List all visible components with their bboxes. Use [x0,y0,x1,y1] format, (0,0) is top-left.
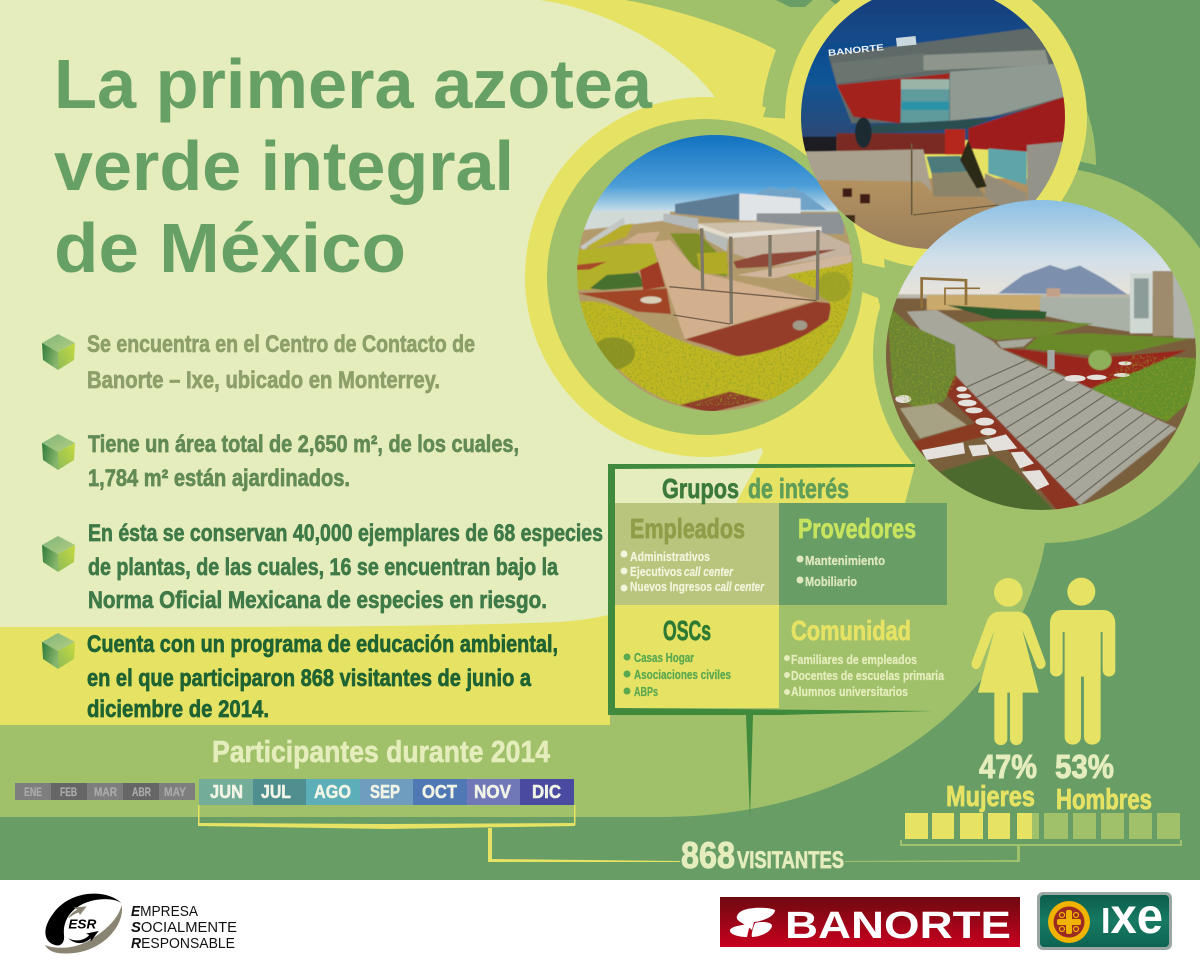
logo: ESR [45,894,237,954]
bullet text: Cuenta con un programa de educación ambiental, [87,631,558,658]
bullet text: En ésta se conservan 40,000 ejemplares de 68 especies [88,520,603,547]
icon: man [1050,578,1115,745]
quadrant: Provedores [796,513,916,589]
icon: cube [42,633,75,669]
quadrant: OSCs: Asociaciones civiles [634,667,731,682]
inactive months [15,783,195,800]
panel frame [608,464,933,715]
panel heading [662,473,849,504]
bullet text: de plantas, de las cuales, 16 se encuentran bajo la [88,554,558,581]
inactive months: ENE [24,785,42,799]
quadrant: Comunidad: Alumnos universitarios [791,684,908,699]
quadrant: Empleados: Administrativos [630,549,710,564]
photo: rooftop walkway and mountain [880,195,1200,515]
inactive months: MAR [94,785,117,799]
bullet text [87,331,475,394]
active months: JUL [261,782,291,802]
title: La primera azotea [54,45,653,123]
quadrant: Comunidad [784,615,945,699]
bullet: área [42,431,519,492]
quadrant: Provedores: Mantenimiento [805,553,885,568]
logo: Ixe: Ixe [1101,888,1163,944]
logo: Banorte [720,897,1020,947]
stat: hombres [1055,748,1152,816]
bullet text: Se encuentra en el Centro de Contacto de [87,331,475,358]
photo: rooftop garden with pergola [570,130,863,418]
logo mark [45,894,122,954]
logo text: SOCIALMENTE [131,920,237,936]
bullet: especies [42,520,603,614]
quadrant backgrounds [615,503,947,708]
logo mark: ESR [68,916,97,931]
active months: JUN [210,782,243,802]
photo: Banorte building: BANORTE [827,42,884,58]
bullet text: en el que participaron 868 visitantes de junio a [87,665,531,692]
quadrant: OSCs: OSCs [663,615,711,646]
quadrant: Comunidad: Comunidad [791,615,911,646]
bullet text: diciembre de 2014. [87,696,269,723]
bullet: ubicación [42,331,475,394]
stat: hombres: Hombres [1056,784,1152,816]
active months: OCT [422,782,457,802]
gender bar [905,813,1180,839]
icon: cube [42,334,75,370]
inactive months: ABR [132,785,151,799]
photo: Banorte building [795,0,1072,253]
panel heading: Grupos [662,473,739,504]
active months: NOV [474,782,511,802]
icon: woman [971,578,1046,745]
title: de México [54,209,406,287]
bullet text [87,631,558,723]
quadrant: Empleados: Ejecutivos [630,564,682,579]
active months [199,779,574,805]
bullet text: Banorte – Ixe, ubicado en Monterrey. [87,367,440,394]
timeline: months [15,779,574,805]
active months: SEP [370,782,400,802]
quadrant: Comunidad: Docentes de escuelas primaria [791,668,945,683]
icon: cube [42,434,75,470]
bullet text: Tiene un área total de 2,650 m², de los cuales, [88,431,519,458]
total: 868 visitantes: VISITANTES [737,847,844,874]
logo text: RESPONSABLE [131,936,235,952]
panel: grupos de interés [608,464,947,715]
logo text: EMPRESA [131,904,198,920]
inactive months: MAY [164,785,186,799]
quadrant: Empleados: Empleados [630,513,745,544]
title: verde integral [54,127,514,205]
stat: hombres: 53% [1055,748,1114,785]
quadrant: Empleados [620,513,765,594]
quadrant: Empleados: Nuevos Ingresos [630,579,712,594]
bracket: visitors to gender bar [845,840,1182,862]
quadrant: OSCs: ABPs [634,684,658,699]
bullet text: Norma Oficial Mexicana de especies en riesgo. [88,587,547,614]
bullet text [88,431,519,492]
quadrant: Empleados: call center [715,579,765,594]
active months: AGO [314,782,351,802]
stat: mujeres [946,748,1037,813]
total: 868 visitantes [681,835,844,876]
logo text [131,904,237,952]
bracket: months to visitors [198,805,680,862]
stat: mujeres: Mujeres [946,781,1035,813]
title [54,45,653,287]
bullet: educación ambiental [42,631,558,723]
quadrant: Comunidad: Familiares de empleados [791,652,917,667]
heading: participantes: Participantes durante 2014 [212,734,551,769]
quadrant: Provedores: Provedores [798,513,916,544]
logo: Ixe [1037,888,1172,950]
icon: cube [42,536,75,572]
quadrant: OSCs [624,615,731,699]
active months: DIC [532,782,561,802]
quadrant: OSCs: Casas Hogar [634,650,694,665]
total: 868 visitantes: 868 [681,835,735,876]
logo: Banorte: BANORTE [785,905,1011,947]
quadrant: Provedores: Mobiliario [805,574,857,589]
bullet text: 1,784 m² están ajardinados. [88,465,350,492]
panel stem connector [746,715,753,820]
quadrant: Empleados: call center [684,564,734,579]
bullet text [88,520,603,614]
logo emblem [730,908,775,937]
panel heading: de interés [748,473,849,504]
stat: mujeres: 47% [979,748,1037,785]
inactive months: FEB [60,785,77,799]
logo emblem [1048,901,1090,943]
